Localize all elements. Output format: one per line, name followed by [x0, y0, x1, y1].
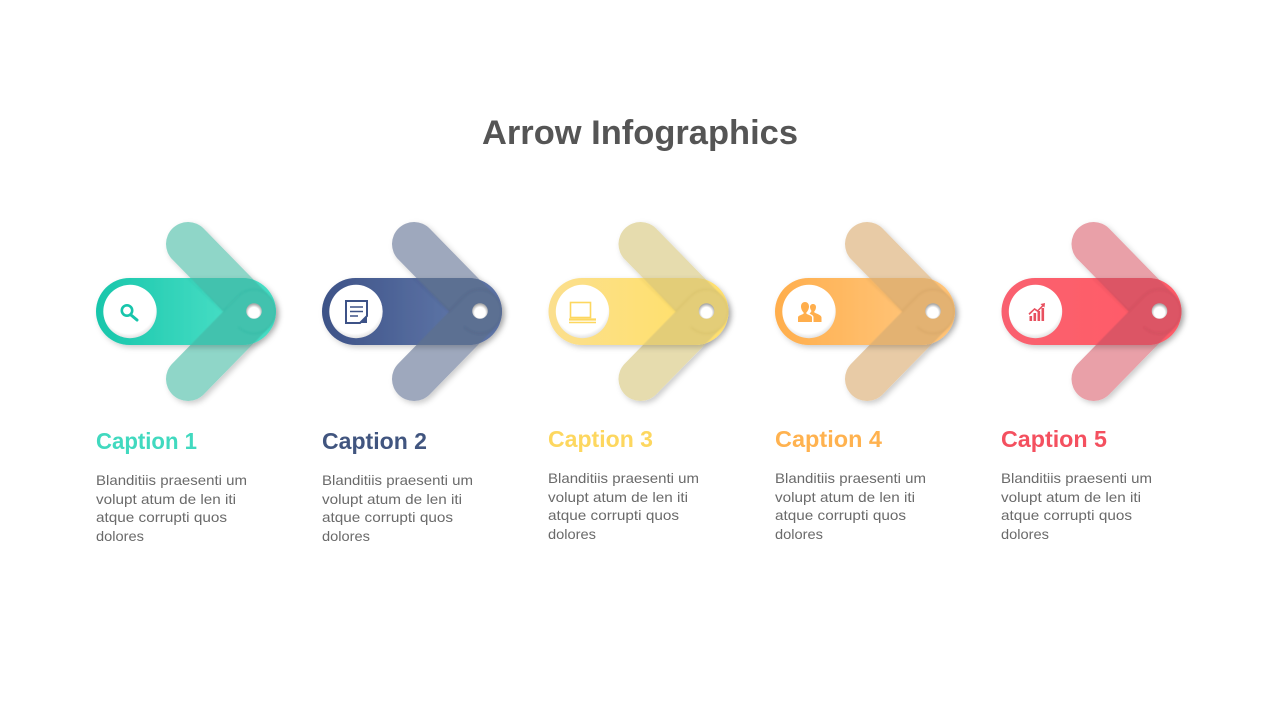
description 5: dolores	[1001, 526, 1049, 542]
description 2: Blanditiis praesenti um	[322, 472, 473, 488]
description 1: volupt atum de len iti	[96, 491, 236, 507]
arrow 4: orange	[775, 244, 955, 379]
description 3: Blanditiis praesenti um	[548, 470, 699, 486]
bar	[548, 278, 728, 345]
arm overlap	[869, 278, 955, 345]
bar	[1002, 278, 1182, 345]
icon: people	[798, 302, 822, 322]
description 4: volupt atum de len iti	[775, 489, 915, 505]
caption 3: Caption 3	[548, 426, 653, 452]
description 3: dolores	[548, 526, 596, 542]
arm overlap	[1094, 278, 1182, 345]
description 1: atque corrupti quos	[96, 509, 227, 525]
icon disc	[1009, 285, 1062, 338]
description 4: dolores	[775, 526, 823, 542]
arrow arms	[1094, 244, 1160, 379]
bar	[322, 278, 502, 345]
arrow arms	[414, 244, 480, 379]
description 2: volupt atum de len iti	[322, 491, 462, 507]
caption 4: Caption 4	[775, 426, 882, 452]
description 3: volupt atum de len iti	[548, 489, 688, 505]
hole	[472, 303, 488, 319]
description 5: volupt atum de len iti	[1001, 489, 1141, 505]
icon: growth chart	[1028, 303, 1045, 321]
description 5: atque corrupti quos	[1001, 507, 1132, 523]
icon disc	[556, 285, 609, 338]
arrow arms	[640, 244, 706, 379]
description 3: atque corrupti quos	[548, 507, 679, 523]
arm overlap	[642, 278, 728, 345]
arm overlap	[417, 278, 502, 345]
arrow 2: navy	[322, 244, 502, 379]
icon: magnifier	[122, 305, 137, 320]
title: Arrow Infographics	[482, 114, 798, 152]
bar	[775, 278, 955, 345]
arrow arms	[867, 244, 933, 379]
arrow arms	[188, 244, 254, 379]
hole	[925, 303, 941, 319]
caption 5: Caption 5	[1001, 426, 1107, 452]
icon: document	[346, 301, 367, 323]
description 2: atque corrupti quos	[322, 509, 453, 525]
description 4: atque corrupti quos	[775, 507, 906, 523]
arrow 3: yellow	[548, 244, 729, 379]
hole	[246, 303, 262, 319]
hole	[1152, 303, 1167, 319]
arrow 5: red	[1002, 244, 1182, 379]
arm overlap	[190, 278, 276, 345]
description 2: dolores	[322, 528, 370, 544]
arrow 1: teal	[96, 244, 276, 379]
icon disc	[103, 285, 157, 338]
icon disc	[782, 285, 836, 338]
caption 2: Caption 2	[322, 428, 427, 454]
description 4: Blanditiis praesenti um	[775, 470, 926, 486]
hole	[699, 303, 714, 319]
icon disc	[329, 285, 383, 338]
description 1: Blanditiis praesenti um	[96, 472, 247, 488]
description 1: dolores	[96, 528, 144, 544]
icon: laptop	[569, 302, 596, 322]
bar	[96, 278, 276, 345]
caption 1: Caption 1	[96, 428, 197, 454]
description 5: Blanditiis praesenti um	[1001, 470, 1152, 486]
